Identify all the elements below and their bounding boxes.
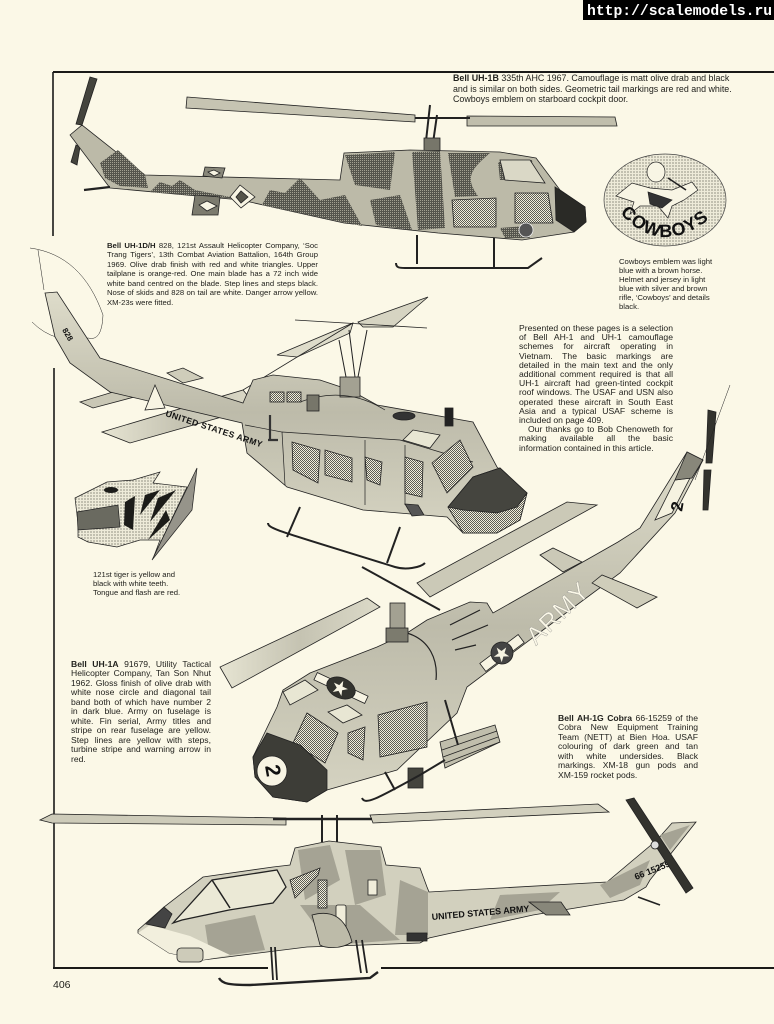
UH-1B diamond tail marking [230, 185, 255, 208]
text: introduction: operated these aircraft in South East [519, 397, 673, 407]
text: introduction: of Bell AH-1 and UH-1 camouflage [519, 332, 673, 342]
UH-1A fuselage star insignia: ★ [488, 640, 516, 669]
red flash [152, 468, 197, 560]
text: Bell UH-1D/H: XM-23s were fitted. [107, 298, 173, 307]
caption: Cowboys emblem: black. [619, 302, 639, 311]
Cobra skids [271, 940, 367, 980]
UH-1D blades [102, 297, 428, 443]
Cobra tailplane [529, 902, 570, 915]
UH-1A roof star insignia: ★ [327, 675, 352, 702]
text: introduction: UH-1 aircraft had green-tinted cockpit [519, 378, 673, 388]
tiger stripes [104, 487, 176, 540]
website watermark bar: http://scalemodels.ru [587, 4, 772, 20]
text: Bell AH-1G Cobra [558, 713, 698, 780]
UH-1A gun pod [408, 768, 423, 788]
Cobra canopy [173, 870, 286, 923]
text: Bell UH-1A: stripe on rear fuselage are yellow. [71, 725, 211, 735]
text: introduction: information contained in this article. [519, 443, 654, 453]
Cobra titles: UNITED STATES ARMY [431, 903, 530, 922]
caption: tiger emblem: Tongue and flash are red. [93, 588, 180, 597]
text: Bell UH-1A: white nose circle and diagonal tail [71, 687, 211, 697]
UH-1A fuselage [253, 452, 703, 802]
text: Bell UH-1D/H: Trang Tigers’, 13th Combat Aviation Battalion, 164th Group [107, 250, 318, 259]
UH-1A tail rotor [695, 385, 730, 510]
text: Bell UH-1D/H: 1969. Olive drab finish with red and white triangles. Upper [107, 260, 318, 269]
text: Bell AH-1G Cobra: Team (NETT) at Bien Hoa. USAF [558, 732, 698, 742]
UH-1D cabin panel lines [245, 395, 473, 505]
UH-1D titles: UNITED STATES ARMY [164, 408, 264, 449]
text: Bell AH-1G Cobra: Bell AH-1G Cobra 66-15259 of the [558, 713, 698, 723]
Cobra main rotor [40, 804, 609, 842]
text: Bell UH-1A: white. Fin serial, Army titles and [71, 716, 211, 726]
text: Bell UH-1A: red. [71, 754, 86, 764]
text: Bell UH-1A: Step lines are yellow with steps, [71, 735, 211, 745]
UH-1D windows [292, 430, 473, 497]
UH-1B windows [452, 160, 553, 227]
text: Bell UH-1D/H: Bell UH-1D/H 828, 121st Assault Helicopter Company, ‘Soc [107, 241, 318, 250]
helicopter: Bell UH-1A three-quarter view [220, 385, 730, 802]
tail rotor of UH-1B [71, 77, 97, 165]
UH-1D tail serial: 828 [60, 326, 75, 343]
text: introduction [519, 323, 673, 453]
caption: Cowboys emblem [619, 257, 712, 311]
UH-1D rotor mast [339, 330, 367, 397]
Cobra tail skid [638, 897, 660, 905]
text: Bell UH-1B: and is similar on both sides. Geometric tail markings are red and white. [453, 84, 732, 94]
Cobra stub wing [312, 913, 352, 948]
text: introduction: Presented on these pages is a selection [519, 323, 673, 333]
text: introduction: Vietnam. The basic markings are [519, 351, 673, 361]
UH-1A tail band and number: 2 [667, 500, 688, 513]
UH-1D triangle marking [145, 385, 165, 410]
UH-1D upper tailplane [167, 368, 203, 383]
UH-1D door tiger emblem [405, 504, 424, 516]
text: Bell UH-1D/H: white band centred on the blade. Step lines and steps black. [107, 279, 318, 288]
UH-1A blades [220, 502, 597, 688]
text: Bell AH-1G Cobra: markings. XM-18 gun pods and [558, 760, 698, 770]
text: introduction: making available all the basic [519, 433, 673, 443]
helicopter: Bell UH-1D/H three-quarter view [30, 248, 527, 568]
UH-1D lower tailplane [80, 392, 138, 408]
text: Bell UH-1A: Helicopter Company, Tan Son Nhut [71, 668, 211, 678]
UH-1D engine details [270, 392, 453, 426]
caption: Cowboys emblem: Cowboys emblem was light [619, 257, 712, 266]
UH-1D fuselage [45, 292, 527, 533]
Cobra engine details [290, 868, 427, 941]
text: Bell UH-1B: Bell UH-1B 335th AHC 1967. Camouflage is matt olive drab and black [453, 73, 729, 83]
UH-1B tailplanes [192, 167, 225, 215]
main rotor of UH-1B [186, 97, 617, 154]
UH-1B camouflage [100, 150, 535, 238]
horse and rider [616, 162, 698, 218]
caption: Cowboys emblem: rifle, ‘Cowboys’ and details [619, 293, 710, 302]
UH-1B skids [396, 235, 542, 268]
Cowboys emblem [604, 154, 726, 246]
UH-1A Army title: ARMY [521, 577, 596, 650]
page number: 406 [53, 979, 71, 991]
UH-1B nose [555, 187, 586, 232]
UH-1A rocket pod [440, 725, 500, 768]
COWBOYS lettering: COWBOYS [622, 207, 708, 238]
Cobra camouflage [205, 825, 690, 958]
text: Bell UH-1A: turbine stripe and warning arrow in [71, 744, 211, 754]
text: Bell UH-1A: Bell UH-1A 91679, Utility Tactical [71, 659, 211, 669]
text: Bell UH-1D/H: tailplane is orange-red. One main blade has a 72 inch wide [107, 269, 318, 278]
UH-1A nose with number 2: 2 [260, 763, 285, 778]
UH-1D step marks [268, 415, 278, 440]
UH-1A skids [362, 700, 458, 801]
text: introduction: schemes for aircraft operating in [519, 341, 673, 351]
helicopter: Bell UH-1B side view [70, 77, 617, 268]
caption: tiger emblem [93, 570, 180, 597]
UH-1A tail band and number [655, 452, 703, 520]
arc reference line [30, 248, 103, 340]
text: introduction: roof windows. The USAF and USN also [519, 387, 673, 397]
Cobra tail rotor [626, 798, 693, 893]
text: Bell UH-1D/H: Nose of skids and 828 on tail are white. Danger arrow yellow. [107, 288, 318, 297]
text: introduction: Our thanks go to Bob Chenoweth for [528, 424, 673, 434]
UH-1D skids [268, 507, 425, 568]
UH-1A far tailplane [540, 548, 582, 572]
caption: Cowboys emblem: Helmet and jersey in light [619, 275, 705, 284]
Cobra tail serial: 66 15259 [633, 859, 672, 882]
tiger head [75, 472, 187, 556]
Cobra white underside [138, 925, 230, 960]
caption: tiger emblem: 121st tiger is yellow and [93, 570, 175, 579]
text: Bell AH-1G Cobra: XM-159 rocket pods. [558, 770, 637, 780]
UH-1A engine cowling [407, 610, 488, 680]
text: introduction: included on page 409. [519, 415, 604, 425]
UH-1B fuselage [70, 125, 586, 240]
UH-1A fuselage star insignia [476, 630, 528, 677]
text: Bell UH-1A [71, 659, 211, 764]
text: introduction: detailed in the main text and the only [519, 360, 673, 370]
UH-1B door emblem [519, 223, 533, 237]
UH-1A rotor mast [386, 603, 408, 642]
text: Bell UH-1B: Cowboys emblem on starboard cockpit door. [453, 94, 628, 104]
helicopter: Bell AH-1G Cobra side view [40, 798, 696, 985]
UH-1A near tailplane [592, 575, 657, 608]
UH-1A windows [283, 680, 427, 763]
UH-1D nose glazing [448, 468, 527, 533]
caption: Cowboys emblem: blue with silver and brown [619, 284, 707, 293]
caption: tiger emblem: black with white teeth. [93, 579, 168, 588]
text: Bell UH-1D/H [107, 241, 318, 307]
text: Bell UH-1A: in dark blue. Army on fuselage is [71, 706, 211, 716]
text: introduction: Asia and a typical USAF scheme is [519, 406, 673, 416]
Cobra nose dark panel [146, 907, 172, 928]
Cobra fuselage [138, 822, 696, 960]
tiger emblem [75, 468, 197, 560]
text: introduction: additional comment required is that all [519, 369, 673, 379]
UH-1A nose with number 2 [253, 733, 327, 802]
text: Bell UH-1A: 1962. Gloss finish of olive drab with [71, 678, 211, 688]
text: Bell UH-1B [453, 73, 732, 104]
UH-1A roof star insignia [311, 667, 371, 711]
tiger mouth [77, 505, 120, 530]
text: Bell AH-1G Cobra: colouring of dark green and tan [558, 741, 698, 751]
text: Bell AH-1G Cobra: Cobra New Equipment Training [558, 722, 698, 732]
text: Bell AH-1G Cobra: with white undersides. Black [558, 751, 698, 761]
Cobra chin turret [177, 948, 203, 962]
text: Bell UH-1A: band both of which have number 2 [71, 697, 211, 707]
caption: Cowboys emblem: blue with a brown horse. [619, 266, 702, 275]
